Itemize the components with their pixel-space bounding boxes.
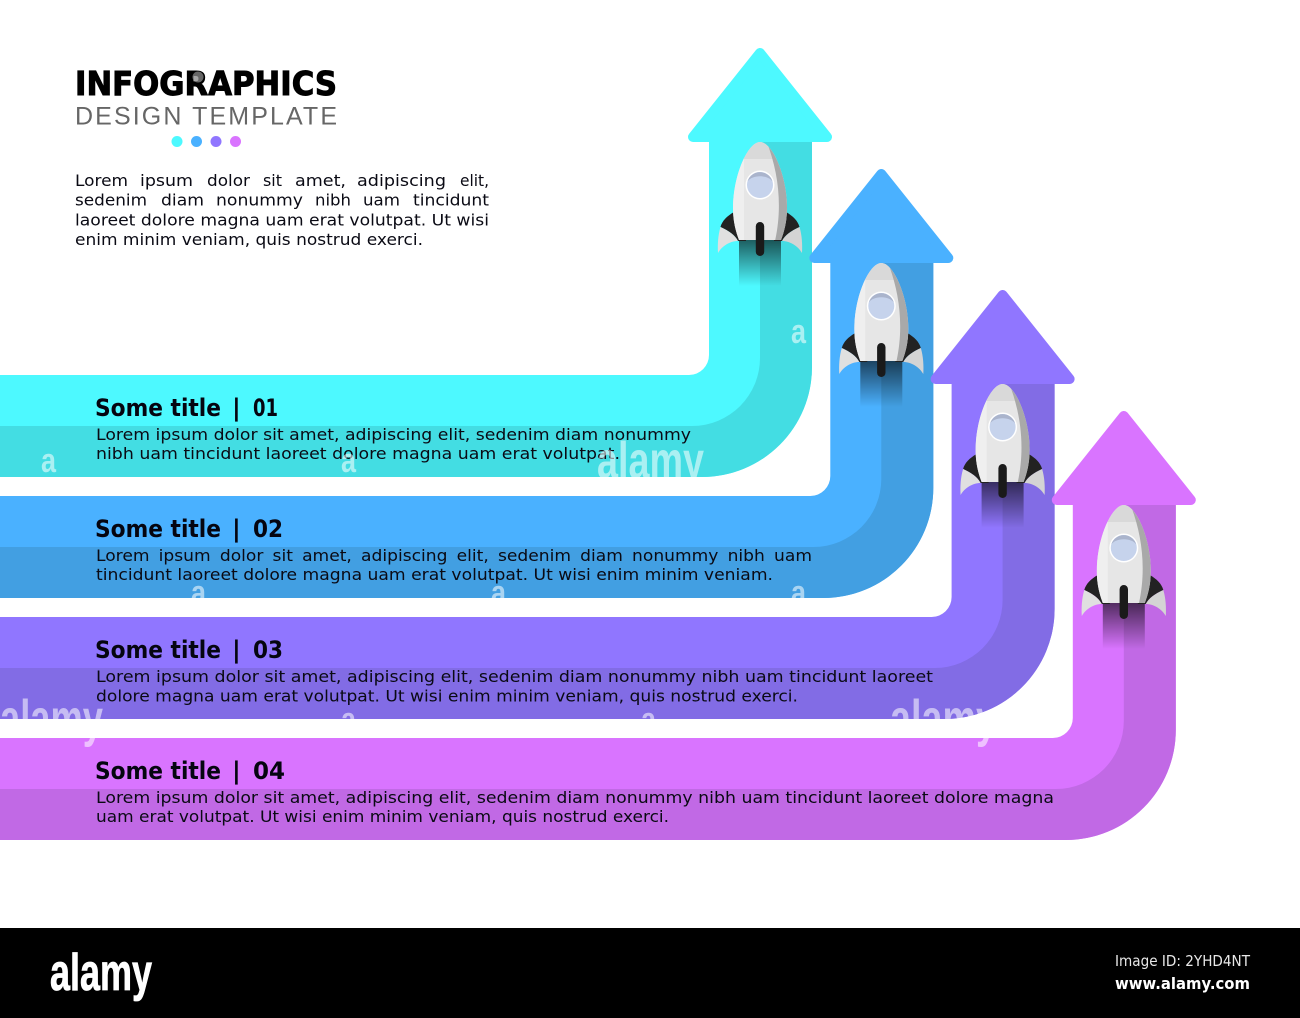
text block 02: Some title <box>95 515 221 543</box>
intro paragraph: enim minim veniam, quis nostrud exerci. <box>75 230 423 249</box>
text block 01: nibh uam tincidunt laoreet dolore magna uam erat volutpat. <box>96 444 620 463</box>
intro paragraph: diam <box>161 190 204 210</box>
text block 04: | <box>232 757 241 785</box>
intro paragraph: Lorem <box>75 171 128 190</box>
text block 03: | <box>232 636 241 664</box>
text block 02: 02 <box>253 515 283 543</box>
watermarks: alamy <box>597 432 704 490</box>
intro paragraph: nonummy <box>216 190 303 210</box>
image id: Image ID: 2YHD4NT <box>1115 952 1251 970</box>
arrow 03: purple <box>0 295 1070 719</box>
text block 01: Lorem ipsum dolor sit amet, adipiscing elit, sedenim diam nonummy <box>96 425 691 444</box>
watermarks: a <box>641 701 657 739</box>
footer bar <box>0 928 1300 1018</box>
intro paragraph: sedenim <box>75 190 147 210</box>
intro paragraph: nibh <box>315 190 351 210</box>
watermarks: a <box>491 574 507 612</box>
text block 03: Some title <box>95 636 221 664</box>
title: INFOGRAPHICS <box>75 64 337 103</box>
intro paragraph: ipsum <box>140 171 193 190</box>
text block 04: Lorem ipsum dolor sit amet, adipiscing elit, sedenim diam nonummy nibh uam tincidunt laoreet dolore magna <box>96 788 1054 807</box>
intro paragraph <box>75 171 489 249</box>
watermarks <box>0 313 997 748</box>
watermarks: alamy <box>890 690 997 748</box>
intro paragraph: adipiscing <box>357 171 446 190</box>
watermarks: a <box>41 442 57 480</box>
arrow 04: pink <box>0 416 1191 840</box>
website: www.alamy.com <box>1115 974 1250 993</box>
intro paragraph: uam <box>363 190 400 210</box>
watermarks: a <box>341 442 357 480</box>
text block 03: Lorem ipsum dolor sit amet, adipiscing elit, sedenim diam nonummy nibh uam tincidunt laoreet <box>96 667 933 686</box>
watermarks: a <box>791 313 807 351</box>
watermarks: a <box>341 701 357 739</box>
text block 02: | <box>232 515 241 543</box>
intro paragraph: amet, <box>295 171 346 190</box>
intro paragraph: tincidunt <box>413 190 489 210</box>
intro paragraph: dolor <box>207 171 250 190</box>
arrow 01: cyan <box>0 53 827 477</box>
text block 02 <box>95 515 812 584</box>
intro paragraph: sit <box>263 171 282 190</box>
text block 04: uam erat volutpat. Ut wisi enim minim veniam, quis nostrud exerci. <box>96 807 669 826</box>
text block 02: Lorem ipsum dolor sit amet, adipiscing elit, sedenim diam nonummy nibh uam <box>96 546 812 565</box>
title <box>75 64 337 130</box>
intro paragraph: elit, <box>460 171 489 190</box>
text block 03 <box>95 636 933 706</box>
intro paragraph: laoreet dolore magna uam erat volutpat. Ut wisi <box>75 210 489 230</box>
text block 02: tincidunt laoreet dolore magna uam erat volutpat. Ut wisi enim minim veniam. <box>96 565 773 584</box>
arrow 02: blue <box>0 174 948 598</box>
alamy logo: alamy <box>50 944 152 1002</box>
title: DESIGN TEMPLATE <box>75 102 337 130</box>
text block 03: dolore magna uam erat volutpat. Ut wisi enim minim veniam, quis nostrud exerci. <box>96 686 798 706</box>
text block 04 <box>95 757 1054 826</box>
text block 01: | <box>232 394 241 422</box>
watermarks: a <box>791 574 807 612</box>
legend dots <box>172 136 241 147</box>
text block 04: 04 <box>253 757 285 785</box>
text block 01 <box>95 394 691 463</box>
text block 04: Some title <box>95 757 221 785</box>
text block 03: 03 <box>253 636 283 664</box>
watermarks: alamy <box>0 690 103 748</box>
watermarks: a <box>191 574 207 612</box>
text block 01: Some title <box>95 394 221 422</box>
text block 01: 01 <box>253 394 278 422</box>
